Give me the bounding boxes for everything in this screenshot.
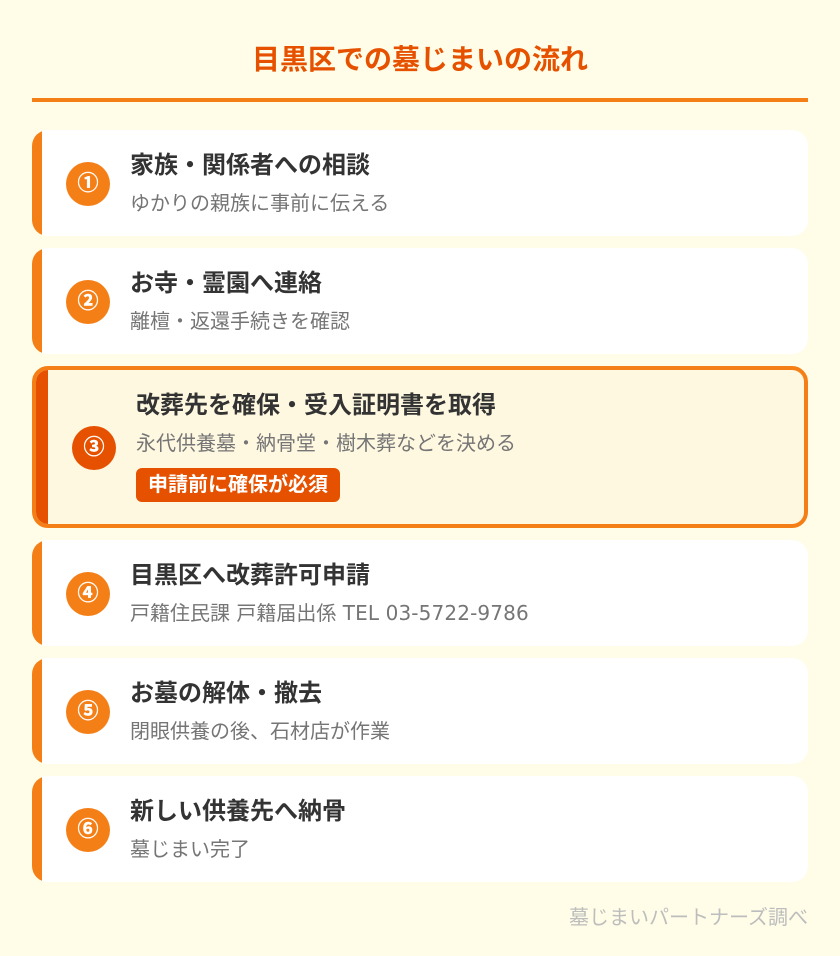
step 3 description: 永代供養墓・納骨堂・樹木葬などを決める	[136, 431, 516, 455]
step 3 highlighted card	[32, 366, 808, 528]
step 5 heading: お墓の解体・撤去	[130, 679, 322, 707]
step 3 accent bar	[36, 370, 48, 524]
step 2 description: 離檀・返還手続きを確認	[130, 309, 350, 333]
step 1 heading: 家族・関係者への相談	[130, 151, 370, 179]
step 3 number	[72, 426, 116, 470]
step 1 description: ゆかりの親族に事前に伝える	[130, 191, 389, 215]
step 1 number	[66, 162, 110, 206]
step 2 heading: お寺・霊園へ連絡	[130, 269, 322, 297]
step 1 card	[32, 130, 808, 236]
step 2 card	[32, 248, 808, 354]
title underline	[32, 98, 808, 102]
step 5 accent bar	[32, 658, 42, 764]
step 6 description: 墓じまい完了	[130, 837, 250, 861]
step 3 badge	[136, 468, 340, 502]
step 4 number: ④	[78, 577, 98, 607]
step 6 card	[32, 776, 808, 882]
step 4 card	[32, 540, 808, 646]
step 6 accent bar	[32, 776, 42, 882]
step 5 number: ⑤	[78, 695, 98, 725]
step 1 accent bar	[32, 130, 42, 236]
step 1 number: ①	[78, 167, 98, 197]
step 2 number	[66, 280, 110, 324]
step 6 number: ⑥	[78, 813, 98, 843]
step 2 accent bar	[32, 248, 42, 354]
step 6 heading: 新しい供養先へ納骨	[130, 797, 346, 825]
step 3 number: ③	[84, 431, 104, 461]
step 3 heading: 改葬先を確保・受入証明書を取得	[136, 391, 496, 419]
step 3 badge: 申請前に確保が必須	[148, 472, 328, 496]
source note: 墓じまいパートナーズ調べ	[569, 905, 808, 929]
step 4 heading: 目黒区へ改葬許可申請	[130, 561, 370, 589]
step 5 number	[66, 690, 110, 734]
title: 目黒区での墓じまいの流れ	[252, 43, 588, 76]
step 2 number: ②	[78, 285, 98, 315]
step 5 description: 閉眼供養の後、石材店が作業	[130, 719, 390, 743]
step 5 card	[32, 658, 808, 764]
step 4 number	[66, 572, 110, 616]
step 4 description: 戸籍住民課 戸籍届出係 TEL 03-5722-9786	[130, 601, 529, 625]
step 4 accent bar	[32, 540, 42, 646]
step 6 number	[66, 808, 110, 852]
